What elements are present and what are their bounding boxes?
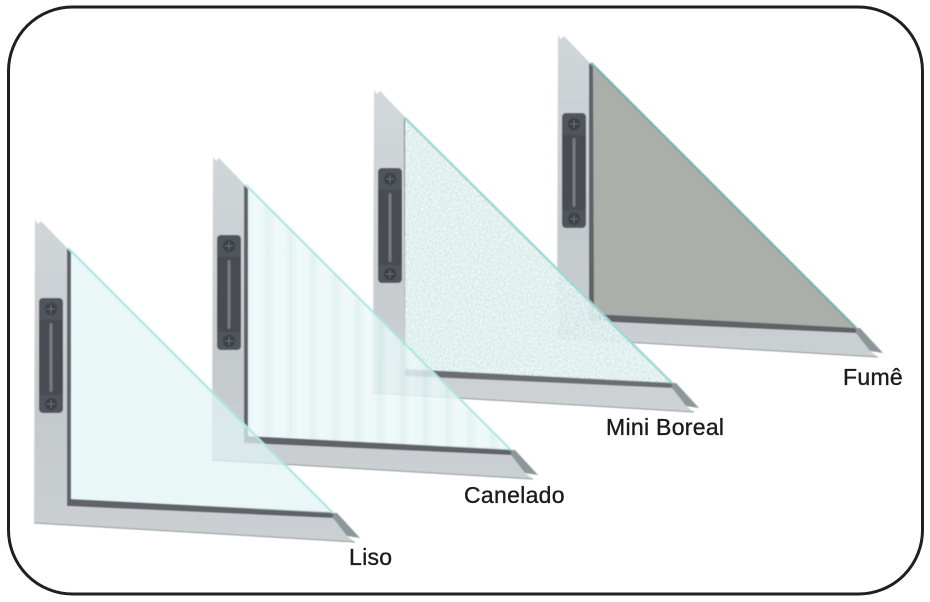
frame edge [373, 383, 699, 412]
dark inner strip [589, 63, 856, 333]
latch [39, 298, 63, 413]
clear glass [71, 250, 333, 513]
label: Canelado: Canelado [464, 482, 565, 508]
glass edge [68, 248, 333, 513]
frame edge [557, 328, 883, 357]
dark inner strip [244, 185, 511, 455]
glass edge [405, 118, 672, 383]
frame edge [34, 513, 360, 542]
latch [217, 235, 241, 350]
dark inner strip [67, 248, 333, 518]
window: Mini Boreal [373, 90, 699, 412]
textured glass [405, 120, 672, 383]
label: Fumê: Fumê [843, 364, 903, 390]
frame [212, 157, 533, 479]
fluted glass [248, 187, 511, 450]
frame [373, 90, 694, 412]
frame edge [212, 450, 538, 479]
frame [34, 220, 355, 542]
glass edge [591, 63, 856, 328]
label: Mini Boreal: Mini Boreal [606, 414, 724, 440]
glass edge [246, 185, 511, 450]
smoked glass [593, 65, 856, 328]
dark inner strip [404, 118, 672, 388]
window: Liso [34, 220, 360, 542]
latch [378, 168, 402, 283]
frame [557, 35, 878, 357]
label: Liso: Liso [349, 544, 392, 570]
window: Fumê [557, 35, 883, 357]
window: Canelado [212, 157, 538, 479]
latch [562, 113, 586, 228]
